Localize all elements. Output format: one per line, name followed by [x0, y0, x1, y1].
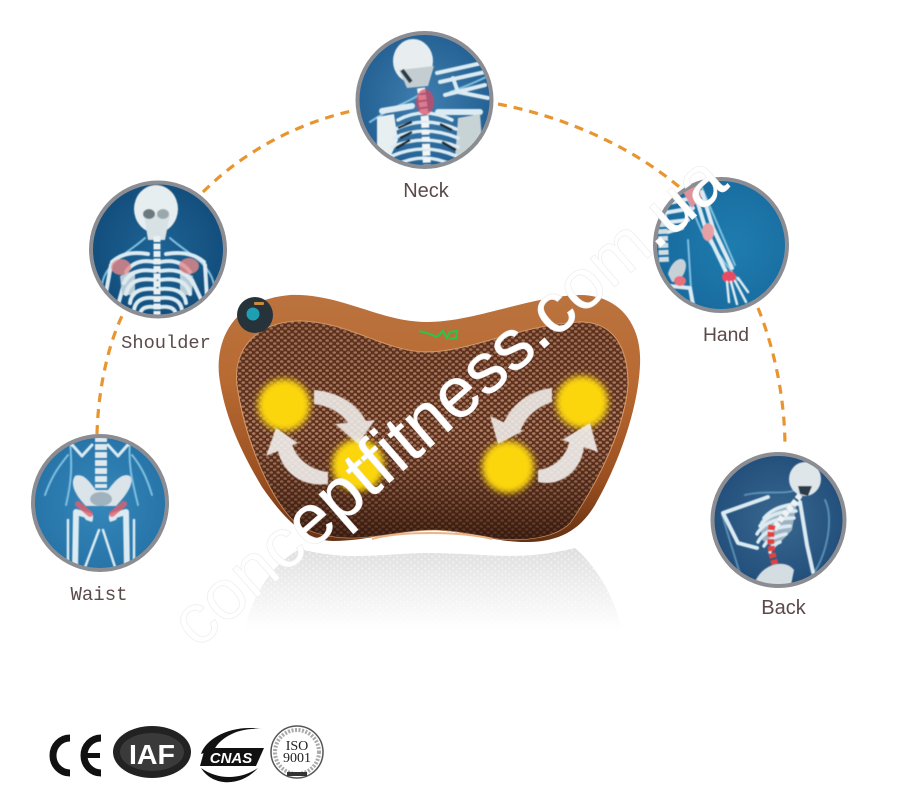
dashed arc: hand to back	[758, 308, 785, 448]
label: Waist: Waist	[70, 584, 128, 606]
body circle: back	[712, 454, 844, 590]
arrow: upper left	[314, 390, 375, 444]
heat spot 4	[556, 376, 608, 428]
body circle: neck	[358, 33, 500, 168]
heat spot 3	[482, 441, 534, 493]
arrow: upper right	[490, 388, 552, 444]
green logo	[419, 331, 457, 339]
logo: IAF	[113, 726, 191, 778]
pillow reflection	[245, 548, 622, 630]
body circle: waist	[33, 436, 167, 570]
logo: ISO 9001	[271, 726, 323, 778]
pillow mesh shading	[237, 321, 628, 540]
label: Neck: Neck	[403, 180, 450, 202]
logo: CE mark	[53, 738, 101, 773]
heat spot 1	[258, 379, 310, 431]
dashed arc: neck to hand	[498, 104, 692, 198]
watermark: conceptfitness.com.ua	[156, 139, 741, 662]
pillow mesh	[237, 321, 628, 540]
dashed arc: shoulder to neck	[203, 110, 356, 192]
logo: CNAS: CNAS	[210, 750, 252, 767]
body circle: hand	[655, 179, 787, 311]
label: Back: Back	[761, 597, 807, 619]
pillow bottom rim	[372, 533, 492, 539]
logo: IAF: IAF	[129, 739, 175, 770]
heat spot 2	[332, 439, 384, 491]
control button	[237, 297, 273, 333]
dashed arc: waist to shoulder	[97, 316, 122, 434]
pillow shell	[219, 295, 640, 542]
logo: ISO 9001: ISO	[286, 739, 308, 754]
body circle: shoulder	[91, 182, 225, 322]
logo: ISO 9001: 9001	[283, 751, 311, 766]
label: Shoulder: Shoulder	[121, 332, 211, 354]
arrow: lower left	[266, 428, 328, 485]
label: Hand: Hand	[703, 325, 749, 346]
certification logos	[53, 726, 323, 782]
arrow: lower right	[538, 423, 598, 483]
logo: CNAS	[200, 728, 264, 782]
massage pillow	[219, 295, 640, 542]
